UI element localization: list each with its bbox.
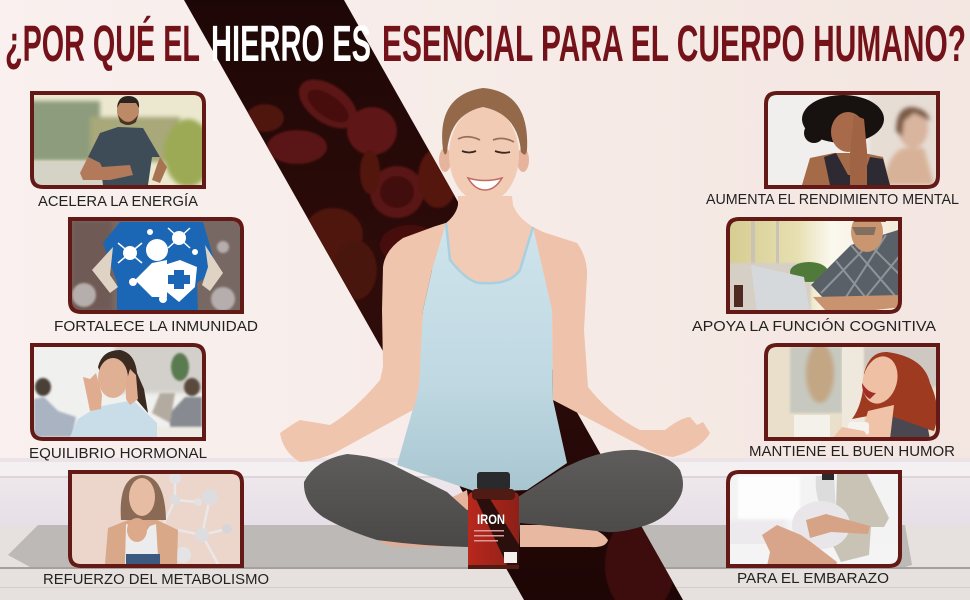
label: acelera la energía: ACELERA LA ENERGÍA — [38, 193, 198, 210]
label: equilibrio hormonal: EQUILIBRIO HORMONAL — [29, 445, 207, 462]
photo: stressed woman in office — [34, 347, 202, 437]
photo: tired women — [768, 95, 936, 185]
photo: man with laptop — [730, 221, 898, 310]
frame — [728, 472, 900, 566]
feet — [520, 525, 608, 547]
panel: aumenta el rendimiento mental — [764, 91, 940, 189]
central woman meditating — [280, 88, 710, 569]
frame — [728, 219, 900, 312]
diagonal band with red blood cells — [184, 0, 683, 600]
panel: acelera la energía — [30, 91, 212, 189]
right arm — [533, 227, 710, 457]
label: para el embarazo: PARA EL EMBARAZO — [737, 570, 889, 587]
photo: woman with molecules — [72, 474, 240, 564]
photo: doctor with shield icon — [72, 221, 240, 310]
label: apoya la función cognitiva: APOYA LA FUNCIÓN COGNITIVA — [692, 318, 936, 335]
panel: apoya la función cognitiva — [726, 212, 902, 315]
frame — [766, 93, 938, 187]
frame — [32, 345, 204, 439]
label: fortalece la inmunidad: FORTALECE LA INMUNIDAD — [54, 318, 258, 335]
frame — [766, 345, 938, 439]
tank top — [397, 223, 567, 492]
photo: laughing red-haired woman — [768, 347, 936, 437]
label: mantiene el buen humor: MANTIENE EL BUEN HUMOR — [749, 443, 955, 460]
panel: equilibrio hormonal — [30, 343, 206, 441]
tank strap binding — [446, 223, 533, 283]
panel: fortalece la inmunidad — [68, 217, 244, 315]
supplement bottle: IRON — [477, 511, 505, 527]
face features — [462, 151, 510, 153]
leggings — [304, 450, 683, 547]
neck shading and head — [439, 148, 451, 172]
title: ¿POR QUÉ EL — [5, 15, 200, 72]
panel: refuerzo del metabolismo — [68, 470, 244, 568]
supplement bottle — [468, 472, 519, 569]
frame — [32, 93, 204, 187]
left arm — [280, 223, 446, 462]
label: refuerzo del metabolismo: REFUERZO DEL METABOLISMO — [43, 571, 269, 588]
frame — [70, 472, 242, 566]
neck and chest skin — [440, 196, 535, 300]
panel: mantiene el buen humor — [764, 343, 940, 441]
label: aumenta el rendimiento mental: AUMENTA EL RENDIMIENTO MENTAL — [706, 191, 959, 208]
photo: pregnant woman on bed — [730, 474, 898, 564]
panel: para el embarazo — [726, 470, 902, 568]
title — [5, 15, 966, 72]
title: HIERRO ES — [211, 15, 371, 72]
photo: runner — [34, 95, 202, 185]
frame — [70, 219, 242, 312]
